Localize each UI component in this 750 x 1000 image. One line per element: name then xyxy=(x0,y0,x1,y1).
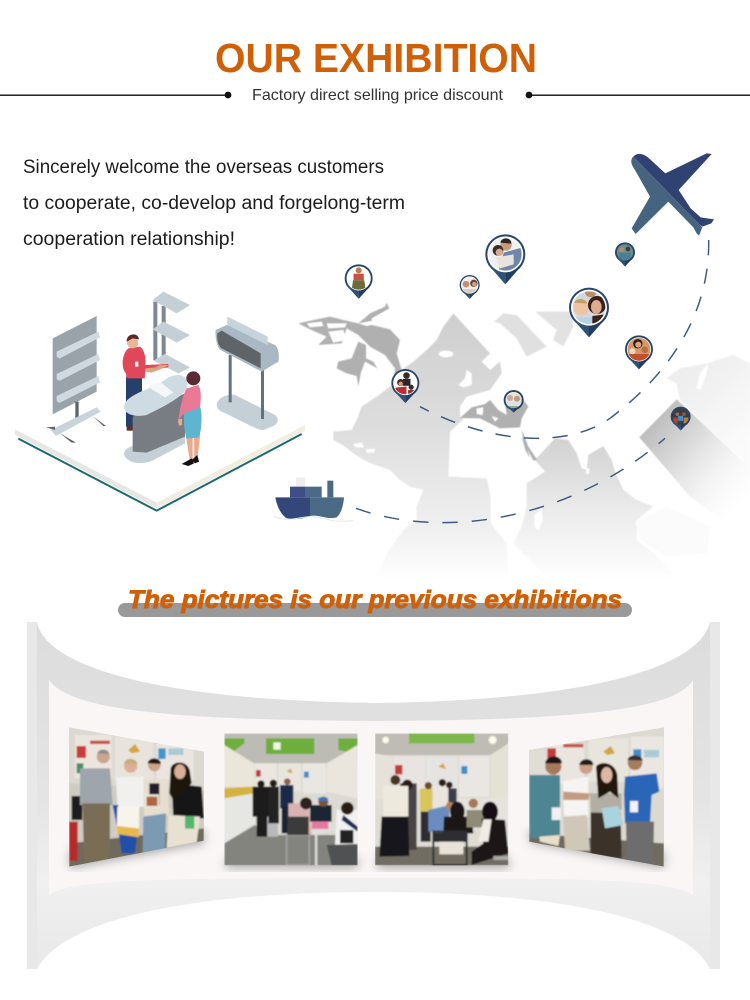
pin 2 xyxy=(485,234,525,284)
section banner: The pictures is our previous exhibitions xyxy=(128,586,622,614)
reception counter xyxy=(124,375,187,463)
world map xyxy=(298,303,750,580)
subtitle with rules xyxy=(0,87,750,104)
woman figure xyxy=(178,371,202,466)
photo 1: team at booth xyxy=(67,725,207,872)
intro text: Sincerely welcome the overseas customers xyxy=(23,157,384,178)
dashed route: ship xyxy=(356,438,665,523)
photo shadows xyxy=(70,830,664,868)
map location pins xyxy=(345,234,691,431)
pin 1 xyxy=(345,264,373,299)
banner stand with shelves xyxy=(46,316,106,443)
pin 7 xyxy=(391,369,419,403)
pin 9 xyxy=(671,407,691,431)
intro text xyxy=(23,157,405,250)
photo 3: visitors in discussion xyxy=(375,733,508,865)
icon: ship xyxy=(273,477,353,521)
pin 5 xyxy=(569,286,609,337)
title: OUR EXHIBITION xyxy=(215,35,537,81)
photo 2: booth with visitors xyxy=(224,733,358,865)
display stand xyxy=(216,317,279,430)
curved exhibition gallery stage xyxy=(27,622,720,969)
dashed route: airplane xyxy=(356,240,709,523)
tiered shelf unit xyxy=(153,292,190,373)
floor platform xyxy=(15,425,305,511)
intro text: to cooperate, co-develop and forgelong-term xyxy=(23,193,405,214)
exhibition booth illustration xyxy=(15,292,305,511)
pin 3 xyxy=(460,275,480,299)
photo 4: team at booth xyxy=(527,725,667,868)
man figure xyxy=(123,334,170,431)
pin 8 xyxy=(504,390,524,413)
pin 6 xyxy=(625,335,653,369)
pin 4 xyxy=(615,242,635,267)
icon: airplane xyxy=(631,153,714,236)
subtitle with rules: Factory direct selling price discount xyxy=(252,87,504,104)
intro text: cooperation relationship! xyxy=(23,229,235,250)
